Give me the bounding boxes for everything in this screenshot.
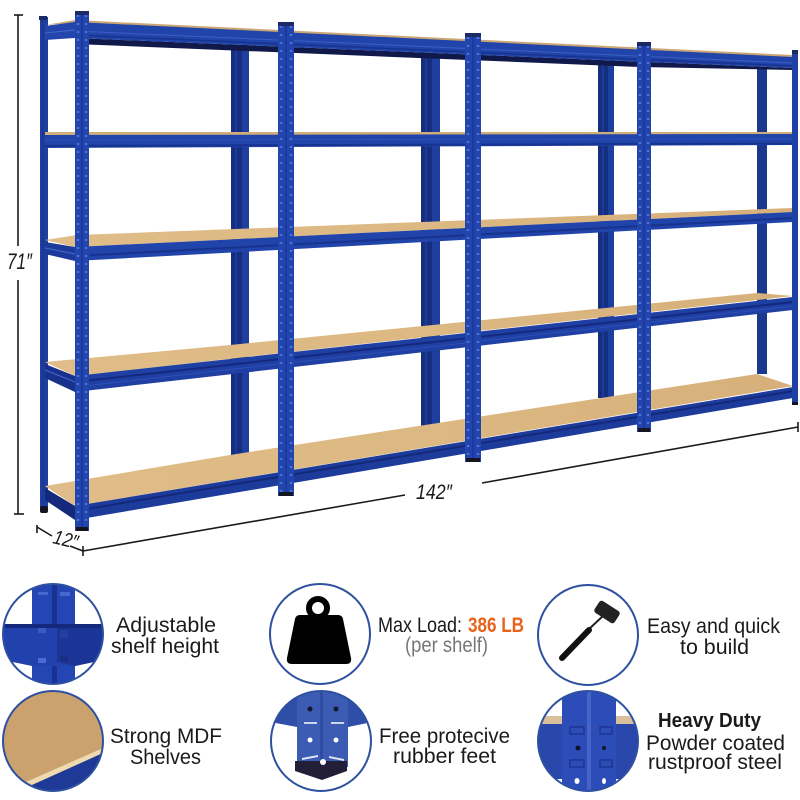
icon: shelf bracket close-up: [3, 584, 103, 684]
icon: rubber mallet: [538, 585, 638, 685]
dimension: height 71 inches: 71″: [7, 249, 33, 274]
dimension: depth 12 inches: 12″: [51, 527, 81, 554]
text: free protective: Free protecive: [379, 725, 510, 748]
text: rubber feet: rubber feet: [393, 745, 496, 768]
back left post: [39, 16, 48, 513]
front post 4: [637, 42, 651, 432]
front post 2: [278, 22, 294, 496]
shelf 2: [45, 132, 793, 148]
shelving unit: [39, 11, 798, 531]
text: shelf height: shelf height: [111, 635, 219, 658]
front post 3: [465, 33, 481, 462]
icon: weight: [270, 584, 370, 684]
dimension: width 142 inches: [83, 422, 798, 556]
text: powder coated: Powder coated: [646, 732, 785, 755]
feature: easy to build: [538, 585, 780, 685]
front post 1: [75, 11, 89, 531]
shelf 1: top: [45, 20, 793, 70]
text: strong MDF: Strong MDF: [110, 725, 222, 748]
icon: powder coated post close-up: [538, 691, 640, 792]
dimension: depth 12 inches: [37, 525, 83, 554]
text: per shelf: (per shelf): [405, 634, 488, 657]
dimension: width 142 inches: 142″: [416, 481, 453, 504]
text: heavy duty: Heavy Duty: [658, 710, 762, 732]
front post 5: [792, 50, 798, 405]
feature: heavy duty: [538, 691, 785, 792]
text: shelves: Shelves: [130, 746, 201, 769]
shelf 4: [45, 293, 793, 392]
feature: rubber feet: [270, 691, 510, 791]
text: rustproof steel: rustproof steel: [648, 751, 782, 774]
shelf 3: [45, 208, 793, 261]
icon: post foot close-up: [270, 691, 372, 791]
feature: max load: [270, 584, 524, 684]
feature: adjustable shelf height: [3, 584, 219, 684]
text: 386 LB: 386 LB: [468, 614, 524, 637]
text: adjustable: Adjustable: [116, 614, 216, 637]
feature: strong MDF shelves: [3, 691, 222, 795]
text: to build: to build: [680, 636, 749, 659]
text: max load label: Max Load:: [378, 614, 462, 637]
icon: MDF board close-up: [3, 691, 103, 795]
text: easy and quick: Easy and quick: [647, 615, 780, 638]
shelf 5: bottom: [45, 374, 793, 520]
rear posts: [231, 45, 767, 455]
